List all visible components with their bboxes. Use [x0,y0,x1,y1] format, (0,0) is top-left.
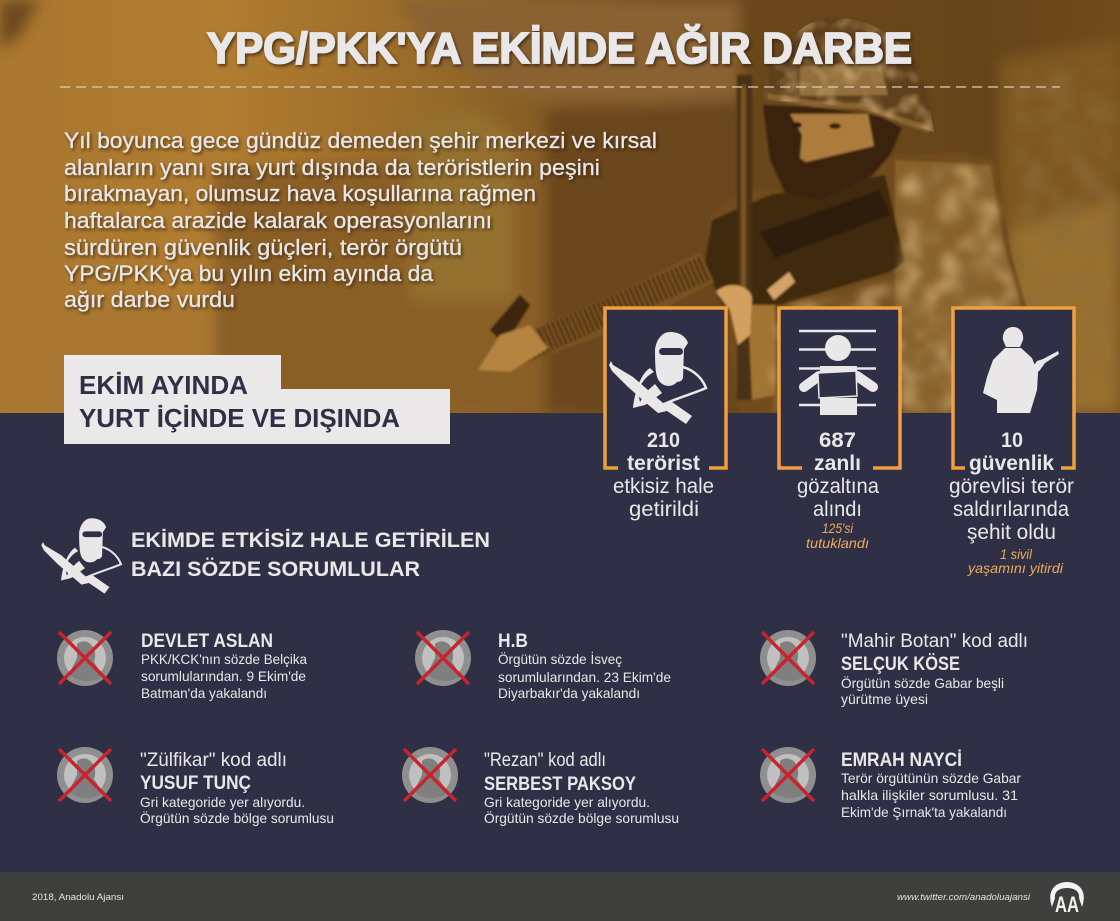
footer: 2018, Anadolu Ajansı [32,892,124,903]
person: Emrah Nayci: Ekim'de Şırnak'ta yakalandı [841,804,1007,820]
person: Yusuf Tunç: Örgütün sözde bölge sorumlusu [140,809,334,826]
intro paragraph: ağır darbe vurdu [64,287,235,312]
icon: masked fighter small [41,518,121,594]
person: Selçuk Köse: SELÇUK KÖSE [841,654,960,675]
stat card: terrorists: terörist [627,452,700,475]
stat card: security forces [949,308,1074,576]
intro paragraph: haftalarca arazide kalarak operasyonlarını [64,208,492,233]
person: H.B: H.B [498,631,528,652]
person: Serbest Paksoy [402,747,679,826]
icon: AA logo: AA [1055,892,1079,917]
person: Devlet Aslan: PKK/KCK'nın sözde Belçika [141,651,307,667]
icon: crossed portrait [760,747,816,803]
intro paragraph: bırakmayan, olumsuz hava koşullarına rağmen [64,181,536,206]
icon: crossed portrait [415,630,471,686]
person: Serbest Paksoy: Gri kategoride yer alıyordu. [484,794,650,810]
icon: crossed portrait [760,630,816,686]
month label box: YURT İÇİNDE VE DIŞINDA [79,403,400,433]
person: Serbest Paksoy: SERBEST PAKSOY [484,774,636,795]
stat card: terrorists [605,308,726,521]
person: Devlet Aslan: DEVLET ASLAN [141,631,273,652]
section heading: neutralised leaders [41,518,490,594]
stat card: detained: zanlı [814,452,861,475]
person: H.B: Örgütün sözde İsveç [498,650,622,667]
stat card: terrorists: 210 [647,429,680,452]
person: Yusuf Tunç: "Zülfikar" kod adlı [140,750,287,771]
person: Serbest Paksoy: "Rezan" kod adlı [484,750,606,771]
icon: crossed portrait [402,747,458,803]
stat card: security forces: 10 [1001,429,1023,452]
person: H.B [415,630,671,701]
icon: AA logo [1050,882,1084,917]
intro paragraph: YPG/PKK'ya bu yılın ekim ayında da [64,261,433,286]
stat card: terrorists: etkisiz hale [613,475,714,498]
stat card: detained [779,308,900,551]
intro paragraph: sürdüren güvenlik güçleri, terör örgütü [64,235,462,260]
person: Yusuf Tunç: Gri kategoride yer alıyordu. [140,794,305,810]
icon: mugshot [799,331,876,415]
icon: crossed portrait [57,747,113,803]
stat card: security forces: 1 sivil [1000,546,1033,562]
stat card: terrorists: getirildi [629,498,699,521]
month label box: EKİM AYINDA [79,370,248,400]
intro paragraph: alanların yanı sıra yurt dışında da teröristlerin peşini [64,155,600,180]
stat card: detained: alındı [813,498,862,521]
person: Emrah Nayci: halkla ilişkiler sorumlusu. 31 [841,787,1018,803]
person: Yusuf Tunç [57,747,334,826]
footer: www.twitter.com/anadoluajansi [897,892,1031,903]
title: YPG/PKK'YA EKİMDE AĞIR DARBE [207,23,912,73]
month label box [64,355,450,444]
stat card: security forces: yaşamını yitirdi [967,560,1064,576]
stat card: security forces: görevlisi terör [949,475,1074,498]
person: Emrah Nayci: EMRAH NAYCİ [841,750,962,771]
intro paragraph: Yıl boyunca gece gündüz demeden şehir merkezi ve kırsal [64,128,657,153]
stat card: detained: tutuklandı [806,535,869,551]
stat card: security forces: saldırılarında [953,498,1069,521]
person: Devlet Aslan: Batman'da yakalandı [141,685,267,701]
person: Selçuk Köse: Örgütün sözde Gabar beşli [841,674,1004,691]
person: Selçuk Köse: "Mahir Botan" kod adlı [841,631,1028,652]
photo: soldier in orange duotone [0,0,1120,415]
person: Devlet Aslan: sorumlularından. 9 Ekim'de [141,668,306,684]
person: Serbest Paksoy: Örgütün sözde bölge sorumlusu [484,809,679,826]
person: Yusuf Tunç: YUSUF TUNÇ [140,773,251,794]
person: Emrah Nayci [760,747,1021,820]
stat card: detained: 687 [819,429,856,452]
stat card: security forces: güvenlik [969,452,1054,475]
icon: masked fighter [609,332,706,424]
stat card: security forces: şehit oldu [967,521,1056,544]
person: Devlet Aslan [57,630,307,701]
person: H.B: sorumlularından. 23 Ekim'de [498,669,671,685]
stat card: detained: gözaltına [797,475,879,498]
person: Selçuk Köse: yürütme üyesi [841,691,928,707]
stat card: detained: 125'si [822,520,854,536]
section heading: neutralised leaders: EKİMDE ETKİSİZ HALE GETİRİLEN [131,529,490,552]
person: Selçuk Köse [760,630,1028,707]
section heading: neutralised leaders: BAZI SÖZDE SORUMLULAR [131,558,420,581]
icon: crossed portrait [57,630,113,686]
soldier body [478,18,1030,413]
person: H.B: Diyarbakır'da yakalandı [498,685,640,701]
person: Emrah Nayci: Terör örgütünün sözde Gabar [841,770,1021,786]
icon: soldier [983,327,1059,413]
intro paragraph [64,128,657,312]
footer [0,872,1120,921]
